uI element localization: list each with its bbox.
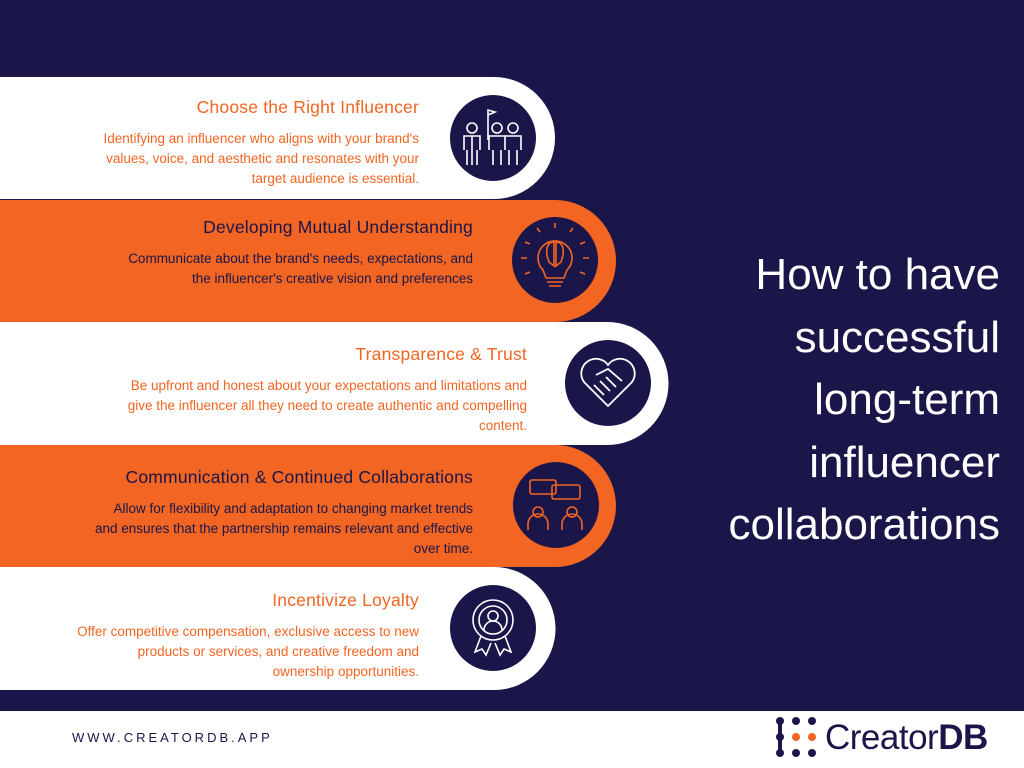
text: trust [128,344,527,433]
title: How to have [755,250,1000,299]
text: loyalty: ownership opportunities. [273,664,419,679]
text: trust: Transparence & Trust [355,344,527,364]
text: choose: values, voice, and aesthetic and resonates with your [106,151,419,166]
icon: badge [450,585,536,671]
logo dots [776,717,816,757]
title [728,250,1000,549]
icon: people with flag [450,95,536,181]
title: influencer [809,438,1000,486]
text: mutual: Developing Mutual Understanding [203,217,473,237]
icon: chat people [513,462,599,548]
icon: heart handshake [565,340,651,426]
text: loyalty [77,590,419,679]
text: communication: Allow for flexibility and adaptation to changing market trends [114,501,473,516]
band 5 [0,567,556,690]
text: communication [95,467,473,556]
text: choose: Choose the Right Influencer [197,97,419,117]
band 4 [0,445,616,567]
text: loyalty: products or services, and creative freedom and [138,644,419,659]
text: choose: Identifying an influencer who aligns with your brand's [103,131,419,146]
title: successful [795,312,1000,362]
title: collaborations [728,500,1000,549]
text: loyalty: Offer competitive compensation, exclusive access to new [77,624,419,639]
text: trust: Be upfront and honest about your expectations and limitations and [131,378,527,393]
text: communication: over time. [414,541,473,556]
text: communication: and ensures that the partnership remains relevant and effective [95,521,473,536]
icon: lightbulb brain [512,217,598,303]
text: mutual [128,217,473,286]
text: communication: Communication & Continued Collaborations [126,467,473,487]
text: choose: target audience is essential. [252,171,419,186]
title: long-term [814,375,1000,424]
band 1 [0,77,555,199]
footer url: WWW.CREATORDB.APP [72,730,273,745]
footer bar [0,711,1024,768]
text: trust: content. [479,418,527,433]
text: mutual: Communicate about the brand's needs, expectations, and [128,251,473,266]
text: choose [103,97,419,186]
text: trust: give the influencer all they need to create authentic and compelling [128,398,527,413]
text: mutual: the influencer's creative vision and preferences [192,271,473,286]
logo text: CreatorDB [825,718,988,757]
band 2 [0,200,616,322]
text: loyalty: Incentivize Loyalty [272,590,419,610]
band 3 [0,322,668,445]
